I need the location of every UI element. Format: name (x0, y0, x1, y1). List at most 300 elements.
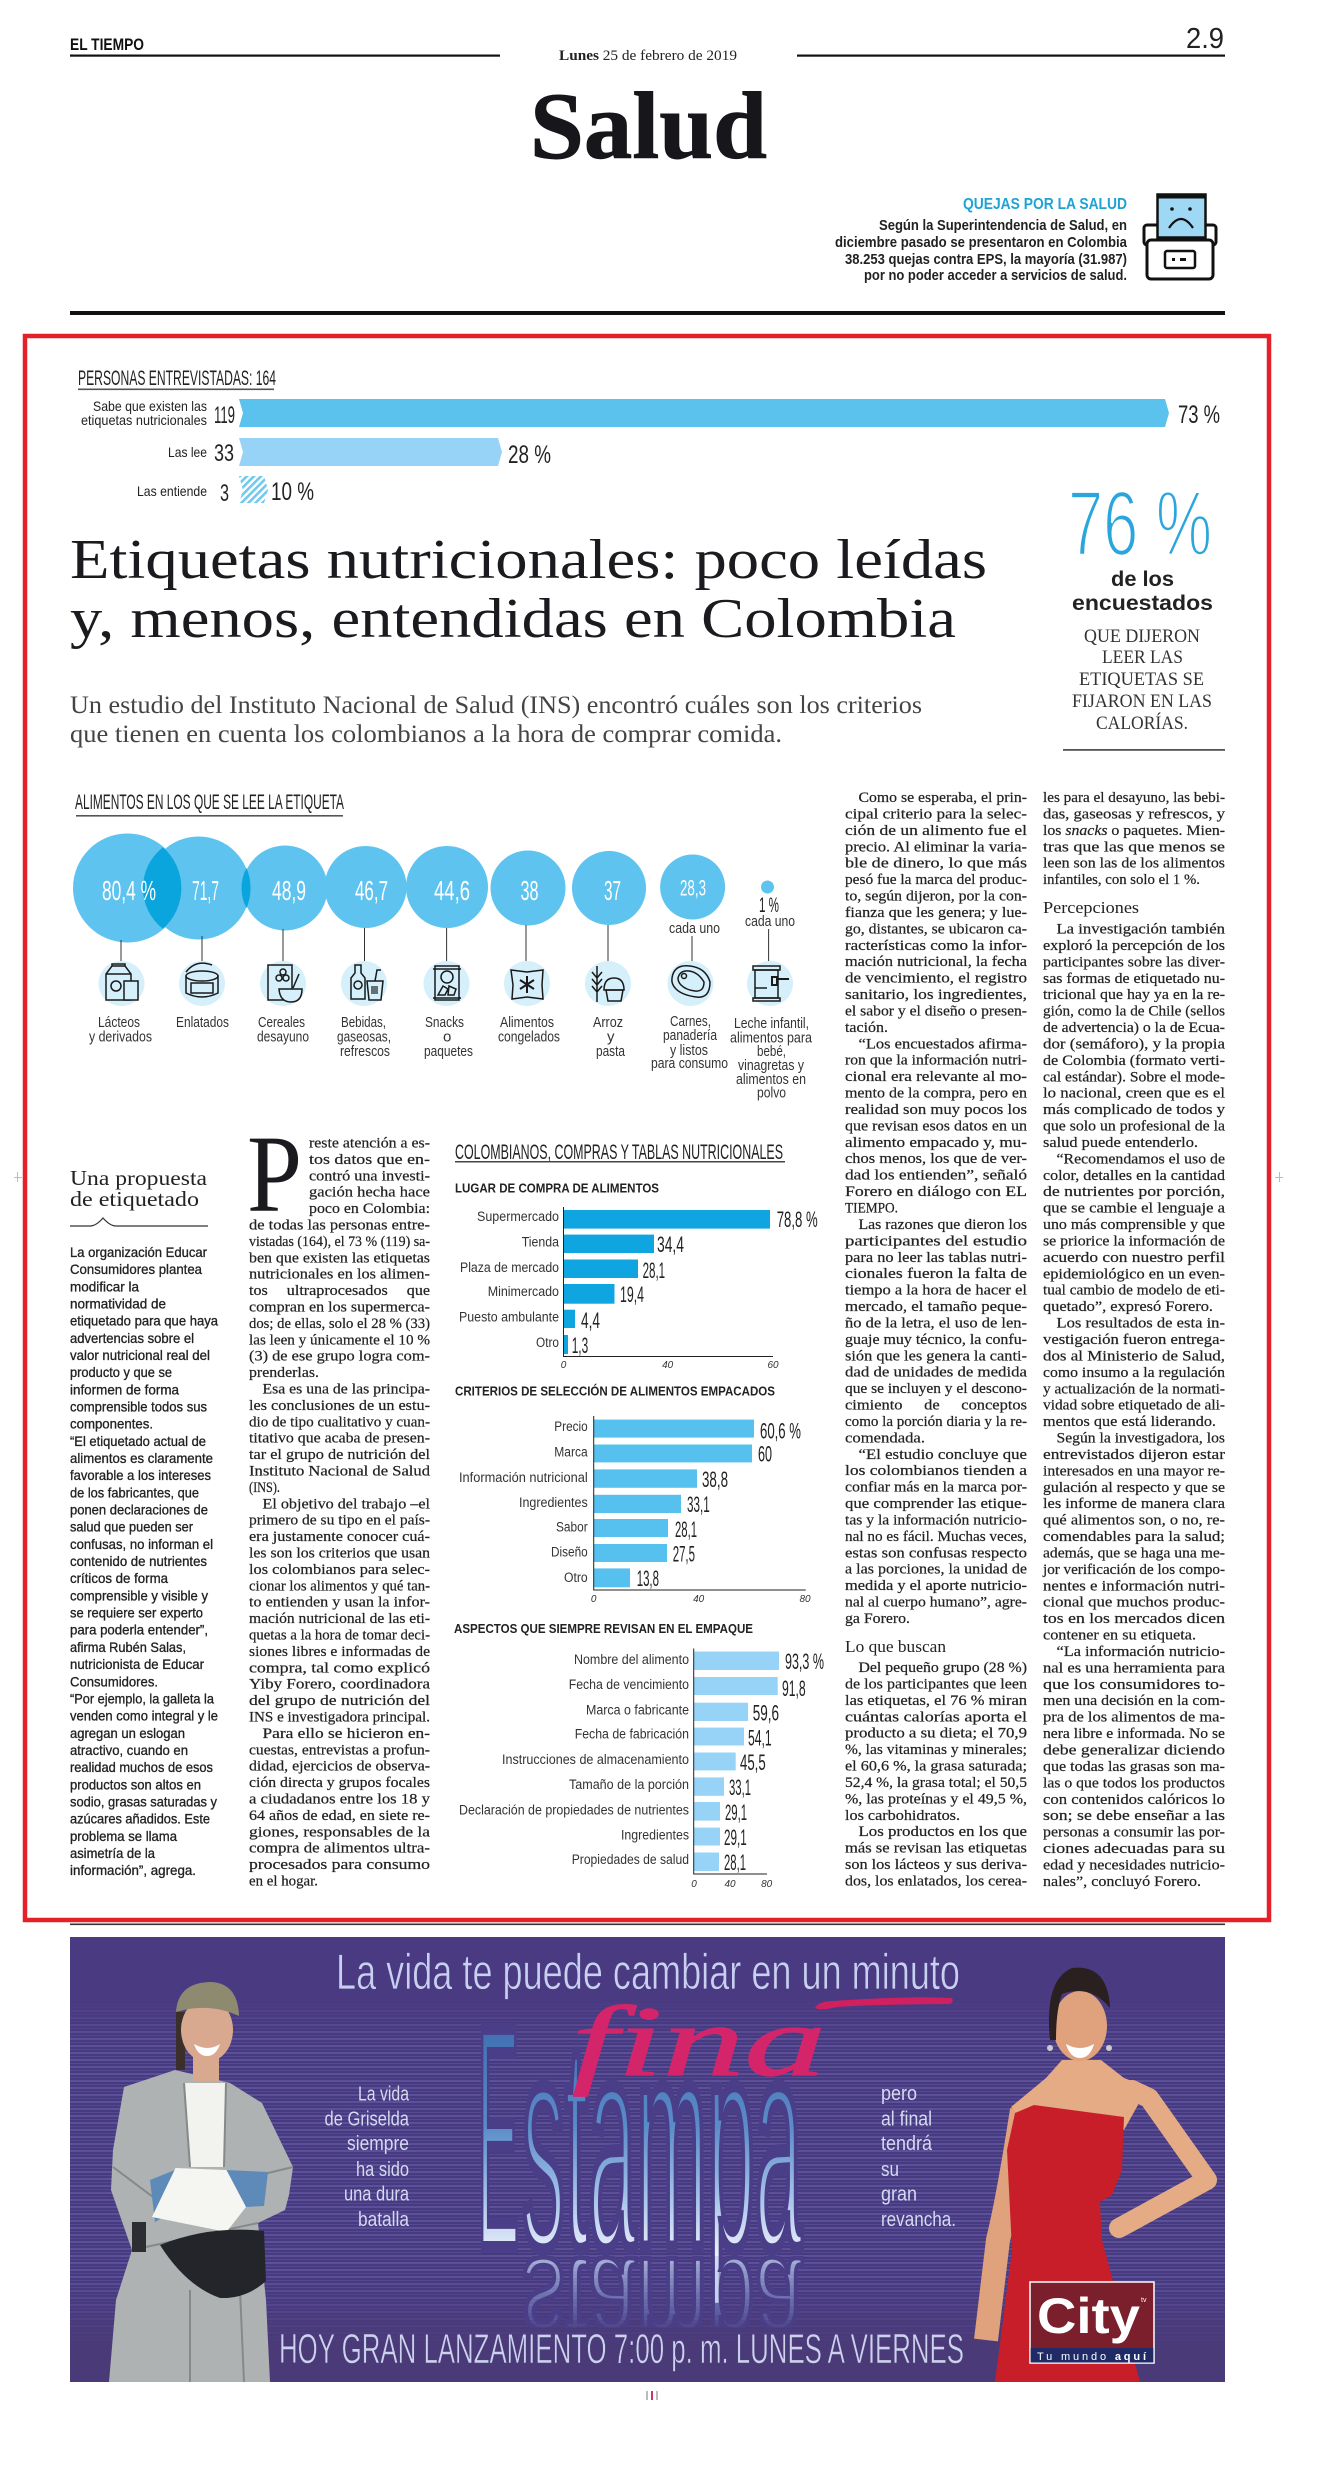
article column 3: tricional que hay ya en la re- (1043, 987, 1225, 1003)
article column 2: to, según dijeron, por la con- (845, 888, 1027, 904)
article column 1: dio de tipo cualitativo y cuan- (249, 1414, 430, 1430)
article column 1: prenderlas. (249, 1365, 319, 1381)
bar chart: aspectos que siempre revisan: 80 (761, 1879, 773, 1890)
chart: personas entrevistadas: 73 % (1178, 401, 1220, 429)
icon: cereal (260, 961, 306, 1006)
article column 3: men una decisión en la com- (1043, 1693, 1225, 1709)
article column 2: dad los entienden”, señaló (845, 1168, 1027, 1184)
food labels: polvo (757, 1084, 786, 1102)
article column 3: nal es una herramienta para (1043, 1660, 1225, 1676)
article column 3: cional que muchos produc- (1043, 1595, 1225, 1611)
bar chart: aspectos que siempre revisan: Fecha de vencimiento (569, 1677, 689, 1692)
figure: woman in work uniform (109, 1982, 293, 2382)
article column 1: Para ello se hicieron en- (262, 1726, 430, 1742)
article column 1: tos datos que en- (309, 1152, 430, 1168)
pink underline swoosh (815, 1997, 953, 2009)
food labels: Bebidas, (341, 1014, 386, 1031)
bar chart: criterios de selección: Otro (564, 1570, 588, 1585)
page number: 2.9 (1186, 23, 1224, 55)
article column 2: guaje muy técnico, la confu- (845, 1332, 1027, 1348)
food labels: Lácteos (98, 1014, 140, 1031)
article column 2: como la porción diaria y la re- (845, 1414, 1027, 1430)
article column 3: nales”, concluyó Forero. (1043, 1874, 1201, 1890)
sidebar text: confusas, no informan el (70, 1536, 213, 1552)
bar chart: aspectos que siempre revisan: 0 (691, 1879, 697, 1890)
bar chart: criterios de selección: 60,6 % (760, 1419, 801, 1444)
food labels: panadería (663, 1027, 718, 1044)
food labels: refrescos (340, 1043, 390, 1060)
bar chart: lugar de compra de alimentos: Puesto ambulante (459, 1310, 559, 1325)
sidebar text: normatividad de (70, 1296, 166, 1312)
ad copy left: ha sido (356, 2159, 409, 2181)
food labels: alimentos para (730, 1030, 813, 1046)
article column 1: primero de su tipo en el país- (249, 1513, 430, 1529)
logo: Estampa: stampa (522, 1975, 802, 2311)
article column 2: ble de dinero, lo que más (845, 856, 1027, 872)
sidebar: quejas por la salud: diciembre pasado se presentaron en Colombia (835, 234, 1128, 251)
article column 3: las o que todos los productos (1043, 1775, 1225, 1791)
main headline: y, menos, entendidas en Colombia (70, 588, 956, 650)
article column 3: cal estándar). Sobre el mode- (1043, 1069, 1225, 1085)
chart: personas entrevistadas: Las lee (168, 444, 207, 460)
article column 3: quetado”, expresó Forero. (1043, 1299, 1213, 1315)
article column 1: contró una investi- (309, 1168, 430, 1184)
sidebar text (70, 1244, 218, 1878)
article column 2: dad de unidades de medida (845, 1365, 1027, 1381)
article column 2: sanitario, los ingredientes, (845, 987, 1027, 1003)
bar chart: lugar de compra de alimentos: LUGAR DE COMPRA DE ALIMENTOS (455, 1180, 659, 1196)
sidebar text: productos son altos en (70, 1776, 201, 1792)
red frame (25, 336, 1269, 1920)
ad copy right (881, 2083, 956, 2231)
article column 3: dos al Ministerio de Salud, (1043, 1348, 1225, 1364)
callout: 76 %: ETIQUETAS SE (1079, 669, 1204, 690)
article column 3: que solo un profesional de la (1043, 1118, 1225, 1134)
article column 3: acuerdo con nuestro perfil (1043, 1250, 1225, 1266)
food labels: Alimentos (500, 1014, 554, 1031)
chart: bubbles by food type: cada uno (669, 920, 720, 937)
sidebar text: se requiere ser experto (70, 1605, 203, 1621)
article column 2: “Los encuestados afirma- (858, 1036, 1027, 1052)
bar chart: aspectos que siempre revisan: 59,6 (753, 1701, 779, 1726)
sidebar text: etiquetado para que haya (70, 1313, 218, 1329)
drop cap: P (247, 1113, 302, 1235)
article column 2: comendada. (845, 1430, 925, 1446)
article column 1: tar el grupo de nutrición del (249, 1447, 430, 1463)
article column 2: alimento empacado y, mu- (845, 1135, 1027, 1151)
callout: 76 %: encuestados (1072, 592, 1213, 615)
article column 2: sión que les genera la canti- (845, 1348, 1027, 1364)
sidebar: quejas por la salud: por no poder acceder a servicios de salud. (864, 267, 1127, 284)
article column 3: infantiles, con solo el 1 %. (1043, 872, 1200, 888)
article column 3: “La información nutricio- (1056, 1644, 1225, 1660)
food labels: Leche infantil, (734, 1015, 809, 1032)
article column 3: les informe de manera clara (1043, 1496, 1225, 1512)
article column 2: estas son confusas respecto (845, 1545, 1027, 1561)
main headline: Etiquetas nutricionales: poco leídas (70, 529, 987, 591)
article column 2: Forero en diálogo con EL (845, 1184, 1027, 1200)
logo: fina: fina (572, 1986, 826, 2097)
article column 2: precio. Al eliminar la varia- (845, 839, 1027, 855)
article column 3: exploró la percepción de los (1043, 938, 1225, 954)
food labels: Enlatados (176, 1014, 229, 1031)
heading: alimentos en los que se lee la etiqueta: ALIMENTOS EN LOS QUE SE LEE LA ETIQUETA (75, 791, 344, 814)
article column 3: como insumo a la regulación (1043, 1365, 1226, 1381)
ad copy left (324, 2084, 410, 2231)
logo: City TV (1030, 2282, 1154, 2363)
bar chart: aspectos que siempre revisan: Nombre del alimento (574, 1652, 689, 1667)
article column 3: además, que se haga una me- (1043, 1546, 1225, 1562)
article column 2: realidad son muy pocos los (845, 1102, 1027, 1118)
sidebar: quejas por la salud: 38.253 quejas contra EPS, la mayoría (31.987) (845, 251, 1127, 268)
article column 3: edad y necesidades nutricio- (1043, 1857, 1225, 1873)
bar chart: criterios de selección: 60 (758, 1441, 772, 1466)
article column 2: ño de la letra, el uso de len- (845, 1315, 1027, 1331)
article column 3: “Recomendamos el uso de (1056, 1151, 1225, 1167)
sidebar text: producto y que se (70, 1364, 172, 1380)
chart: personas entrevistadas: 10 % (271, 478, 314, 506)
article column 1: ción directa y grupos focales (249, 1775, 430, 1791)
callout: 76 %: FIJARON EN LAS (1072, 691, 1212, 712)
bar chart: lugar de compra de alimentos: 34,4 (657, 1232, 684, 1257)
bar chart: aspectos que siempre revisan: 93,3 % (785, 1649, 824, 1674)
sidebar text: agregan un eslogan (70, 1725, 185, 1741)
bar chart: aspectos que siempre revisan: ASPECTOS QUE SIEMPRE REVISAN EN EL EMPAQUE (454, 1621, 753, 1636)
food labels: Cereales (258, 1014, 305, 1031)
article column 3: con contenidos calóricos lo (1043, 1792, 1225, 1808)
food labels: vinagretas y (738, 1057, 804, 1074)
logo: Estampa: stampa (522, 2229, 802, 2380)
logo: City TV: Tu mundo aquí (1037, 2351, 1147, 2363)
chart: personas entrevistadas: Las entiende (137, 483, 207, 499)
chart: bubbles by food type: 37 (604, 875, 621, 906)
icon: infant formula (747, 961, 793, 1006)
article column 1: (3) de ese grupo logra com- (249, 1349, 430, 1365)
bar chart: lugar de compra de alimentos: 78,8 % (777, 1207, 818, 1232)
article column 3: comendables para la salud; (1043, 1529, 1225, 1545)
article column 2: medida y el aporte nutricio- (845, 1578, 1027, 1594)
sidebar text: problema se llama (70, 1828, 177, 1844)
sidebar text: advertencias sobre el (70, 1330, 194, 1346)
article column 2: mento de la compra, pero en (845, 1086, 1028, 1102)
article column 2: para no leer las tablas nutri- (845, 1250, 1027, 1266)
bar chart: lugar de compra de alimentos: 28,1 (643, 1258, 665, 1283)
article column 3: jor verificación de los compo- (1042, 1562, 1225, 1578)
article column 3: color, detalles en la cantidad (1043, 1168, 1226, 1184)
chart: bubbles by food type: 71,7 (192, 875, 219, 906)
section title: Salud (530, 73, 767, 179)
bar chart: aspectos que siempre revisan: 54,1 (748, 1726, 772, 1750)
bar chart: lugar de compra de alimentos: Otro (536, 1335, 559, 1350)
subheading: lo que buscan: Lo que buscan (845, 1637, 946, 1656)
bar chart: lugar de compra de alimentos: Minimercado (488, 1284, 559, 1299)
article column 2: confiar más en la marca por- (845, 1480, 1027, 1496)
bar chart: criterios de selección: Información nutricional (459, 1470, 588, 1485)
sidebar text: Consumidores. (70, 1673, 158, 1689)
article column 2: cional era relevante al mo- (845, 1069, 1027, 1085)
article column 1: a ciudadanos entre los 18 y (249, 1792, 431, 1808)
article column 1: to entienden y usan la infor- (249, 1595, 430, 1611)
article column 3: se priorice la información de (1043, 1234, 1225, 1250)
article column 3: nera libre e informada. No se (1043, 1726, 1225, 1742)
bar chart: lugar de compra de alimentos: 1,3 (572, 1333, 588, 1358)
sidebar text: venden como integral y le (70, 1708, 218, 1724)
article column 2: Las razones que dieron los (858, 1217, 1027, 1233)
food labels: para consumo (651, 1055, 728, 1072)
article column 1: INS e investigadora principal. (249, 1710, 430, 1726)
bar chart: aspectos que siempre revisan (454, 1621, 824, 1890)
sidebar text: La organización Educar (70, 1244, 207, 1260)
chart: bubbles by food type: 38 (520, 875, 538, 906)
bar chart: aspectos que siempre revisan: 91,8 (782, 1676, 806, 1701)
bar chart: criterios de selección: 0 (591, 1594, 597, 1605)
bar chart: criterios de selección: 38,8 (702, 1467, 728, 1492)
header rule right (797, 54, 1225, 57)
chart: personas entrevistadas: Sabe que existen las (93, 398, 207, 414)
article column 3: y actualización de la normati- (1043, 1381, 1225, 1397)
food labels: Carnes, (670, 1013, 711, 1030)
article column 3: de nutrientes por porción, (1043, 1184, 1225, 1200)
sidebar text: valor nutricional real del (70, 1347, 210, 1363)
sidebar text: atractivo, cuando en (70, 1742, 188, 1758)
article column 1: del grupo de nutrición del (249, 1693, 430, 1709)
bar chart: lugar de compra de alimentos: 19,4 (620, 1282, 644, 1307)
article column 2: Como se esperaba, el prin- (858, 790, 1027, 806)
sidebar: quejas por la salud (835, 196, 1128, 284)
bar chart: criterios de selección: 27,5 (673, 1541, 695, 1566)
bar chart: aspectos que siempre revisan: Marca o fabricante (586, 1703, 689, 1718)
chart: bubbles by food type: 46,7 (355, 875, 388, 906)
article column 1: poco en Colombia: (309, 1201, 430, 1217)
article column 2: a las porciones, la unidad de (845, 1562, 1027, 1578)
article column 3: nentes e información nutri- (1043, 1578, 1225, 1594)
bar chart: aspectos que siempre revisan: Ingredientes (621, 1828, 689, 1843)
icon: snacks (424, 961, 470, 1006)
article column 3: más complicado de todos y (1043, 1102, 1226, 1118)
article column 3: leen son las de los alimentos (1043, 856, 1225, 872)
article column 3: les para el desayuno, las bebi- (1043, 790, 1225, 806)
food labels: gaseosas, (337, 1029, 391, 1046)
chart: personas entrevistadas: 119 (214, 402, 235, 429)
sidebar text: ponen declaraciones de (70, 1502, 208, 1518)
bar chart: lugar de compra de alimentos: 60 (767, 1360, 779, 1371)
article column 2: go, distantes, se ubicaron ca- (845, 921, 1027, 937)
icon: rice and pasta (585, 961, 631, 1006)
sidebar text: “Por ejemplo, la galleta la (70, 1690, 214, 1706)
article column 1: cionar los alimentos y qué tan- (249, 1578, 430, 1594)
article column 3: Según la investigadora, los (1056, 1430, 1225, 1446)
sidebar text: para poderla entender”, (70, 1622, 208, 1638)
article column 3: gulación al respecto y que se (1043, 1480, 1225, 1496)
bar chart: lugar de compra de alimentos: 0 (561, 1360, 567, 1371)
newspaper brand: EL TIEMPO (70, 35, 144, 54)
food labels: o (443, 1029, 451, 1046)
heading: personas entrevistadas: PERSONAS ENTREVISTADAS: 164 (78, 367, 276, 390)
article column 3: dor (semáforo), y la propia (1043, 1036, 1225, 1052)
bar chart: criterios de selección: Precio (554, 1419, 588, 1434)
article column 2: mercado, el tamaño peque- (845, 1299, 1027, 1315)
sidebar text: afirma Rubén Salas, (70, 1639, 186, 1655)
food labels (89, 1013, 813, 1102)
icon: canned food (179, 961, 225, 1006)
article column 3: epidemiológico en un even- (1043, 1266, 1225, 1282)
bar chart: lugar de compra de alimentos: Plaza de mercado (460, 1260, 559, 1275)
bar chart: aspectos que siempre revisan: 45,5 (740, 1750, 766, 1775)
article column 3: das, gaseosas y refrescos, y (1043, 806, 1226, 822)
food labels: paquetes (424, 1043, 473, 1060)
bar chart: lugar de compra de alimentos (455, 1180, 818, 1371)
bar chart: criterios de selección: 80 (799, 1594, 811, 1605)
deck (70, 692, 922, 748)
ad headline: La vida te puede cambiar en un minuto (336, 1944, 960, 2000)
article column 1: ben que existen las etiquetas (249, 1250, 430, 1266)
article column 1: cuestas, entrevistas a profun- (249, 1742, 430, 1758)
icon: frozen (504, 961, 550, 1006)
article column 2: fianza que les genera; y lue- (845, 905, 1027, 921)
food labels: Arroz (593, 1014, 623, 1031)
article column 2: ción de un alimento fue el (845, 823, 1027, 839)
advertisement: Fina Estampa (70, 1937, 1225, 2382)
article column 1: procesados para consumo (249, 1857, 430, 1873)
article column 3: mentos que está liderando. (1043, 1414, 1216, 1430)
ad copy right: su (881, 2159, 899, 2181)
chart: bubbles by food type: 80,4 % (102, 875, 156, 906)
article column 1: giones, responsables de la (249, 1824, 430, 1840)
article column 2: de vencimiento, el registro (845, 971, 1027, 987)
article column 1: nutricionales en los alimen- (249, 1267, 430, 1283)
callout: 76 %: 76 % (1068, 473, 1212, 575)
article column 2: el 60,6 %, la grasa saturada; (845, 1758, 1027, 1774)
bar chart: criterios de selección: Sabor (556, 1520, 588, 1535)
food labels: desayuno (257, 1029, 309, 1046)
ad copy right: gran (881, 2184, 917, 2206)
main headline (70, 529, 987, 650)
article column 1: compra, tal como explicó (249, 1660, 430, 1676)
food labels: bebé, (757, 1043, 786, 1060)
article column 2: mación nutricional, la fecha (845, 954, 1027, 970)
article column 1: siones libres e informadas de (249, 1644, 430, 1660)
article column 3: que los consumidores to- (1043, 1677, 1225, 1693)
sidebar heading: una propuesta de etiquetado: Una propuesta (70, 1166, 208, 1190)
article column 1: compran en los supermerca- (249, 1300, 430, 1316)
article column 3: tras que las que menos se (1043, 839, 1225, 855)
article column 1: los colombianos para selec- (249, 1562, 430, 1578)
subheading: percepciones: Percepciones (1043, 898, 1139, 917)
article column 1: quetas a la hora de tomar deci- (249, 1628, 430, 1644)
article column 2: ron que la información nutri- (845, 1053, 1027, 1069)
sidebar text: comprensible y visible y (70, 1587, 208, 1603)
article column 2: Los productos en los que (858, 1824, 1027, 1840)
article column 2 (845, 790, 1028, 1890)
article column 2: los colombianos tienden a (845, 1463, 1027, 1479)
article column 2: nal no es fácil. Muchas veces, (845, 1529, 1027, 1545)
sidebar text: alimentos es claramente (70, 1450, 213, 1466)
article column 2: “El estudio concluye que (858, 1447, 1027, 1463)
article column 2: TIEMPO. (845, 1200, 898, 1216)
article column 3: lo nacional, creen que es el (1043, 1086, 1225, 1102)
sidebar text: realidad muchos de esos (70, 1759, 213, 1775)
bar chart: criterios de selección: 40 (693, 1594, 705, 1605)
article column 1: 64 años de edad, en siete re- (249, 1808, 430, 1824)
article column 1: reste atención a es- (309, 1136, 430, 1152)
bar chart: criterios de selección: Diseño (551, 1544, 588, 1560)
food labels: alimentos en (736, 1071, 806, 1088)
article column 2: %, las vitaminas y minerales; (845, 1742, 1027, 1758)
logo: City TV: tv (1141, 2297, 1147, 2304)
article column 1: Yiby Forero, coordinadora (249, 1677, 430, 1693)
chart: bubbles by food type: 44,6 (434, 875, 470, 906)
icon: meat (668, 961, 714, 1006)
food labels: y derivados (89, 1029, 152, 1046)
sidebar text: “El etiquetado actual de (70, 1433, 206, 1449)
sidebar text: asimetría de la (70, 1845, 155, 1861)
article column 3: participantes sobre las diver- (1043, 954, 1225, 970)
bar chart: criterios de selección: 33,1 (687, 1492, 710, 1517)
article column 2: producto a su dieta; el 70,9 (845, 1726, 1027, 1742)
sidebar text: de los fabricantes, que (70, 1484, 199, 1500)
article column 3: son; se debe enseñar a las (1043, 1808, 1225, 1824)
logo: City TV: City (1037, 2288, 1140, 2344)
sidebar text: sodio, grasas saturadas y (70, 1793, 217, 1809)
sidebar text: salud que pueden ser (70, 1519, 193, 1535)
article column 2: chos menos, los que de ver- (845, 1151, 1027, 1167)
chart: personas entrevistadas: 3 (220, 480, 229, 507)
article column 3: personas a consumir las por- (1043, 1825, 1225, 1841)
article column 3: los snacks o paquetes. Mien- (1043, 823, 1225, 839)
date: Lunes 25 de febrero de 2019 (559, 48, 737, 64)
deck: Un estudio del Instituto Nacional de Salud (INS) encontró cuáles son los criterios (70, 692, 922, 719)
article column 3: qué alimentos son, o no, re- (1043, 1513, 1225, 1529)
article column 1: las leen y únicamente el 10 % (249, 1332, 430, 1348)
article column 3: que se cambie el lenguaje a (1043, 1201, 1225, 1217)
article column 2: %, las proteínas y el 49,5 %, (845, 1791, 1027, 1807)
food labels: congelados (498, 1029, 560, 1046)
sidebar text: información”, agrega. (70, 1862, 196, 1878)
article column 3: tual cambio de modelo de eti- (1043, 1283, 1225, 1299)
article column 2: que se incluyen y el descono- (845, 1381, 1027, 1397)
sidebar text: modificar la (70, 1278, 139, 1294)
chart: personas entrevistadas: 28 % (508, 441, 551, 469)
article column 2: cimiento de conceptos (845, 1398, 1027, 1414)
sidebar text: nutricionista de Educar (70, 1656, 204, 1672)
article column 1: Esa es una de las principa- (262, 1382, 430, 1398)
article column 3: La investigación también (1056, 922, 1226, 938)
bar chart: aspectos que siempre revisan: 40 (724, 1879, 736, 1890)
article column 2: tación. (845, 1020, 888, 1036)
article column 2: las etiquetas, el 76 % miran (845, 1693, 1028, 1709)
sidebar text: comprensible todos sus (70, 1398, 207, 1414)
ad copy left: una dura (344, 2184, 410, 2206)
bar chart: aspectos que siempre revisan: Propiedades de salud (572, 1852, 689, 1867)
article column 2: cipal criterio para la selec- (845, 806, 1027, 822)
bar chart: criterios de selección: 13,8 (637, 1566, 659, 1591)
article column 1: titativo que acaba de presen- (249, 1431, 430, 1447)
article column 2: de los participantes que leen (845, 1676, 1028, 1692)
article column 1: dos; de ellas, solo el 28 % (33) (249, 1316, 430, 1332)
article column 3: debe generalizar diciendo (1043, 1742, 1225, 1758)
article column 2: más se revisan las etiquetas (845, 1841, 1027, 1857)
bar chart: aspectos que siempre revisan: 33,1 (729, 1775, 751, 1800)
article column 2: racterísticas como la infor- (845, 938, 1027, 954)
bar: sabe que existen (239, 399, 1169, 427)
article column 2: pesó fue la marca del produc- (845, 872, 1027, 888)
chart: bubbles by food type: cada uno (745, 913, 795, 930)
article column 1: (INS). (249, 1480, 280, 1496)
article column 2: tiempo a la hora de hacer el (845, 1283, 1027, 1299)
bar chart: lugar de compra de alimentos: Supermercado (477, 1209, 559, 1224)
article column 2: ga Forero. (845, 1611, 910, 1627)
food labels: y (607, 1029, 615, 1046)
